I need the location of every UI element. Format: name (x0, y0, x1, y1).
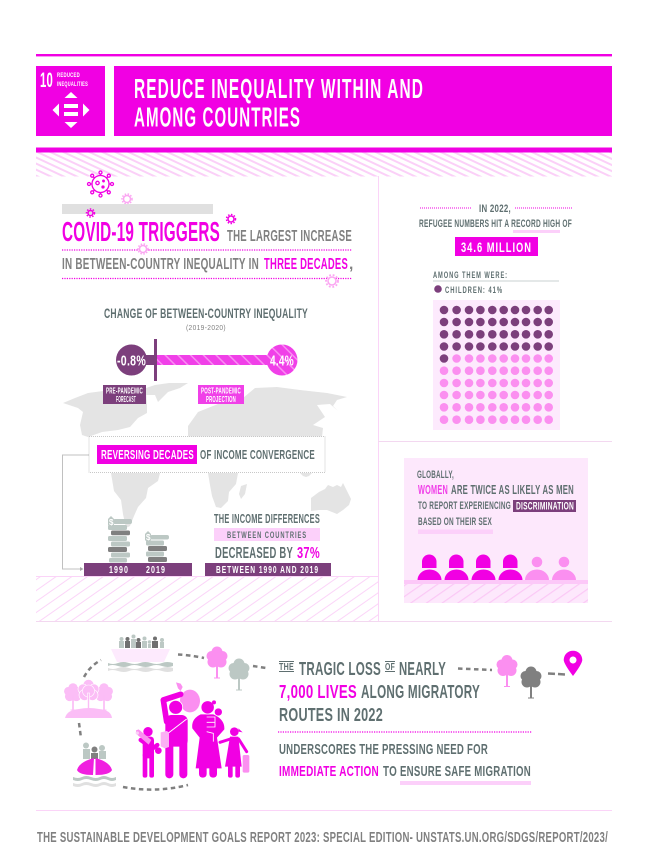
icon: boat bottom (73, 742, 116, 787)
route to pin (458, 651, 582, 698)
icon: coin stack 2019 (145, 531, 169, 562)
icon: family of migrants (136, 682, 249, 778)
panel divider lines and hatch (36, 176, 612, 622)
text: immediate action: TO (383, 763, 397, 780)
chart: change of between-country inequality: CHANGE OF BETWEEN-COUNTRY INEQUALITY (104, 305, 308, 321)
icon: location pin (564, 651, 582, 676)
headline line 2: THREE DECADES (264, 256, 348, 273)
right value (266, 344, 298, 376)
panel: discrimination: BASED ON THEIR SEX (418, 516, 492, 528)
positive bar (157, 355, 282, 365)
panel: discrimination: DISCRIMINATION (516, 500, 574, 512)
title banner: AMONG COUNTRIES (134, 102, 301, 132)
negative bar (132, 355, 155, 365)
post-pandemic label: POST-PANDEMIC (201, 386, 241, 396)
route dashes (79, 654, 266, 790)
panel: refugees: IN 2022, (479, 203, 511, 215)
mother (192, 700, 224, 778)
pre-pandemic label: FORECAST (116, 394, 136, 404)
top rule (36, 54, 612, 56)
headline line 1: THE LARGEST INCREASE (227, 228, 352, 245)
left value (116, 344, 147, 376)
icon: coin stack 2019: $ (146, 533, 151, 542)
icon: coin stack 1990: $ (109, 518, 114, 527)
text: immediate action: IMMEDIATE ACTION (279, 763, 379, 780)
headline line 2: , (349, 256, 354, 273)
goal 10 icon: INEQUALITIES (57, 81, 88, 88)
goal 10 icon: REDUCED (57, 72, 80, 79)
panel: discrimination: GLOBALLY, (417, 469, 454, 481)
text: tragic loss: ROUTES IN 2022 (279, 704, 383, 725)
icon: boat top (108, 634, 173, 672)
text: income differences: BETWEEN 1990 AND 2019 (216, 565, 319, 576)
legend: CHILDREN: 41% (445, 285, 503, 296)
icon: coin stack 1990 (108, 516, 132, 562)
text: tragic loss: OF (385, 662, 395, 673)
panel: refugees (419, 203, 572, 430)
icon: trees left (64, 680, 113, 718)
right value: 4.4% (270, 352, 294, 370)
headline line 1: COVID-19 TRIGGERS (62, 216, 220, 247)
text: tragic loss: NEARLY (399, 658, 446, 679)
text: tragic loss: TRAGIC LOSS (299, 658, 381, 679)
left value: -0.8% (117, 352, 146, 370)
father (161, 694, 188, 778)
text: income differences (205, 512, 331, 576)
panel: discrimination: TO REPORT EXPERIENCING (418, 500, 511, 512)
panel: discrimination (404, 458, 588, 603)
hatched band (36, 148, 612, 176)
big number (455, 237, 538, 256)
decorative highlight (62, 204, 213, 214)
year labels: 2019 (146, 565, 166, 576)
title banner: REDUCE INEQUALITY WITHIN AND (134, 73, 424, 104)
text: tragic loss: 7,000 LIVES (279, 681, 357, 702)
goal 10 icon (36, 66, 105, 136)
callout: reversing decades: OF INCOME CONVERGENCE (200, 447, 315, 462)
dot chart (433, 300, 560, 430)
world map (63, 383, 351, 528)
post-pandemic label (198, 385, 244, 404)
icon: trees upper (206, 646, 250, 690)
pre-pandemic label (103, 385, 146, 404)
goal 10 icon: 10 (40, 69, 53, 92)
text: immediate action: UNDERSCORES THE PRESSING NEED FOR (279, 741, 488, 758)
pre-pandemic label: PRE-PANDEMIC (106, 386, 143, 396)
text: tragic loss: ALONG MIGRATORY (361, 681, 480, 702)
bundle (176, 682, 200, 712)
panel: refugees: AMONG THEM WERE: (433, 270, 508, 281)
panel: discrimination: ARE TWICE AS LIKELY AS MEN (451, 483, 574, 497)
text: tragic loss (279, 658, 480, 725)
year labels: 1990 (109, 565, 129, 576)
callout: reversing decades (89, 436, 325, 472)
icon: small virus 2 (86, 209, 94, 217)
chart: change of between-country inequality: (2019-2020) (186, 323, 226, 332)
headline line 2: IN BETWEEN-COUNTRY INEQUALITY IN (62, 256, 259, 273)
text: immediate action (279, 741, 531, 785)
text: income differences: THE INCOME DIFFERENCES (214, 512, 320, 526)
chart: change of between-country inequality (103, 305, 308, 404)
text: immediate action: ENSURE SAFE MIGRATION (400, 763, 531, 780)
callout: reversing decades: REVERSING DECADES (101, 447, 194, 462)
icon: small virus 5 (326, 275, 338, 287)
icon: people row (418, 555, 576, 580)
icon: small virus 1 (122, 194, 132, 204)
year labels (84, 563, 192, 576)
post-pandemic label: PROJECTION (206, 394, 236, 404)
boy (136, 727, 162, 778)
big number: 34.6 MILLION (461, 239, 532, 255)
panel: covid headline (62, 171, 354, 287)
title banner (114, 66, 612, 136)
text: income differences: BETWEEN COUNTRIES (227, 530, 307, 541)
text: tragic loss: THE (279, 662, 294, 673)
text: income differences: 37% (297, 545, 320, 562)
legend (434, 285, 503, 296)
icon: small virus 3 (226, 214, 236, 224)
arrow: bracket to timeline (62, 455, 89, 571)
icon: small virus 4 (138, 244, 148, 254)
panel: discrimination: WOMEN (418, 483, 448, 497)
girl (220, 727, 249, 778)
icon: large virus (88, 171, 114, 197)
text: income differences: DECREASED BY (215, 545, 293, 562)
